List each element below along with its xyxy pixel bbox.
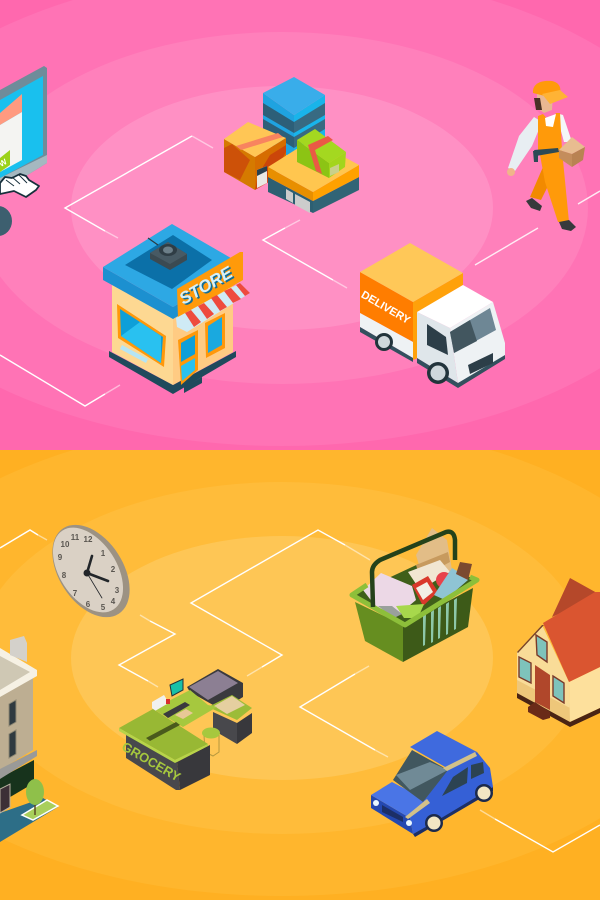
windshield: [450, 308, 496, 353]
clock numerals: 3: [115, 586, 120, 595]
left arm: [508, 117, 542, 171]
main counter: GROCERY: [119, 739, 184, 785]
side counter: [208, 695, 252, 744]
icon: pointer hand: [0, 174, 39, 197]
panel: yellow background: [0, 420, 600, 900]
cargo top: [360, 243, 463, 302]
connector lines: yellow panel: [0, 530, 600, 852]
grille: [468, 353, 493, 374]
door: [535, 665, 550, 710]
front leg: [540, 150, 569, 222]
grass plot: [22, 800, 58, 820]
roof: [0, 648, 37, 697]
icon: stack of parcels: [224, 77, 359, 213]
clock numerals: 11: [71, 533, 80, 542]
icon: delivery truck: DELIVERY: [359, 289, 413, 327]
clock numerals: 12: [84, 535, 93, 544]
icon: delivery man: [507, 81, 585, 231]
orange parcel: [224, 122, 286, 190]
door: [178, 330, 198, 385]
rear roof: [552, 578, 600, 617]
roof: [410, 731, 477, 768]
side body: [410, 752, 493, 834]
left window: [117, 304, 166, 367]
upper windows: [9, 700, 16, 758]
panel: pink background: [0, 0, 600, 450]
main roof: [543, 592, 600, 682]
overalls: [538, 113, 562, 152]
right window: [205, 313, 225, 358]
cornice: [0, 750, 37, 779]
boots: [526, 198, 542, 211]
icon: blue car: [371, 731, 493, 837]
street: [0, 798, 58, 842]
icon: city building: [0, 636, 58, 842]
flat parcel: [268, 140, 359, 213]
clock numerals: 2: [111, 565, 116, 574]
basket handle: [372, 532, 455, 607]
icon: wall clock: [36, 511, 146, 631]
clock numerals: [58, 533, 120, 612]
head and cap: [537, 94, 553, 113]
door: [0, 784, 10, 813]
clock hands: [84, 556, 108, 598]
back counter: [153, 690, 217, 727]
underside: [413, 787, 493, 837]
windshield: [393, 750, 448, 802]
terminal: [152, 679, 193, 719]
clock numerals: 9: [58, 553, 63, 562]
conveyor unit: [187, 669, 243, 710]
side window: [427, 324, 448, 355]
clock numerals: 10: [61, 540, 70, 549]
gable wall: [517, 625, 570, 722]
cab: [417, 285, 505, 388]
parcel: [559, 137, 585, 154]
store sign: [176, 252, 243, 318]
racing stripes: [405, 752, 477, 819]
wheels: [425, 784, 493, 832]
tree: [26, 779, 44, 815]
upper wall: [0, 677, 33, 770]
stool: [202, 728, 220, 756]
headlights: [373, 800, 412, 826]
basket body: [355, 588, 473, 662]
windows: [519, 635, 564, 703]
icon: delivery truck: [359, 243, 505, 388]
awning: [176, 283, 250, 332]
basket back and rim shadow: [352, 560, 477, 625]
side wall: [569, 667, 600, 722]
lower storey: [0, 760, 34, 803]
icon: shopping basket: [352, 528, 477, 662]
base: [109, 351, 236, 394]
clock numerals: 1: [101, 549, 106, 558]
side windows: [442, 762, 484, 796]
icon: house: [517, 578, 600, 727]
front face: [371, 795, 413, 834]
trailing leg: [530, 160, 556, 200]
grille: [382, 805, 403, 822]
icon: computer monitor with cursor: [0, 66, 47, 236]
connector lines: pink panel: [0, 136, 600, 406]
store sign: STORE: [178, 264, 238, 310]
chimney: [10, 636, 27, 662]
hood: [371, 782, 430, 818]
store sign: STORE: [176, 263, 236, 308]
foundation: [517, 693, 600, 727]
icon: grocery checkout counter: [119, 669, 252, 790]
clock numerals: 6: [86, 600, 91, 609]
basket slots: [423, 598, 457, 646]
groceries: [363, 528, 472, 618]
clock numerals: 8: [62, 571, 67, 580]
clock numerals: 7: [73, 589, 78, 598]
basket rim: [352, 577, 477, 625]
clock numerals: 4: [111, 597, 116, 606]
cargo end strip: [413, 273, 463, 360]
clock numerals: 5: [101, 603, 106, 612]
roof: [103, 224, 243, 319]
wheels: [375, 333, 449, 384]
blue stacked box: [263, 77, 325, 170]
walls: [112, 285, 173, 385]
green parcel: [297, 129, 346, 178]
rooftop unit: [148, 238, 187, 270]
icon: store building: [103, 224, 250, 394]
cargo side: [360, 272, 413, 342]
